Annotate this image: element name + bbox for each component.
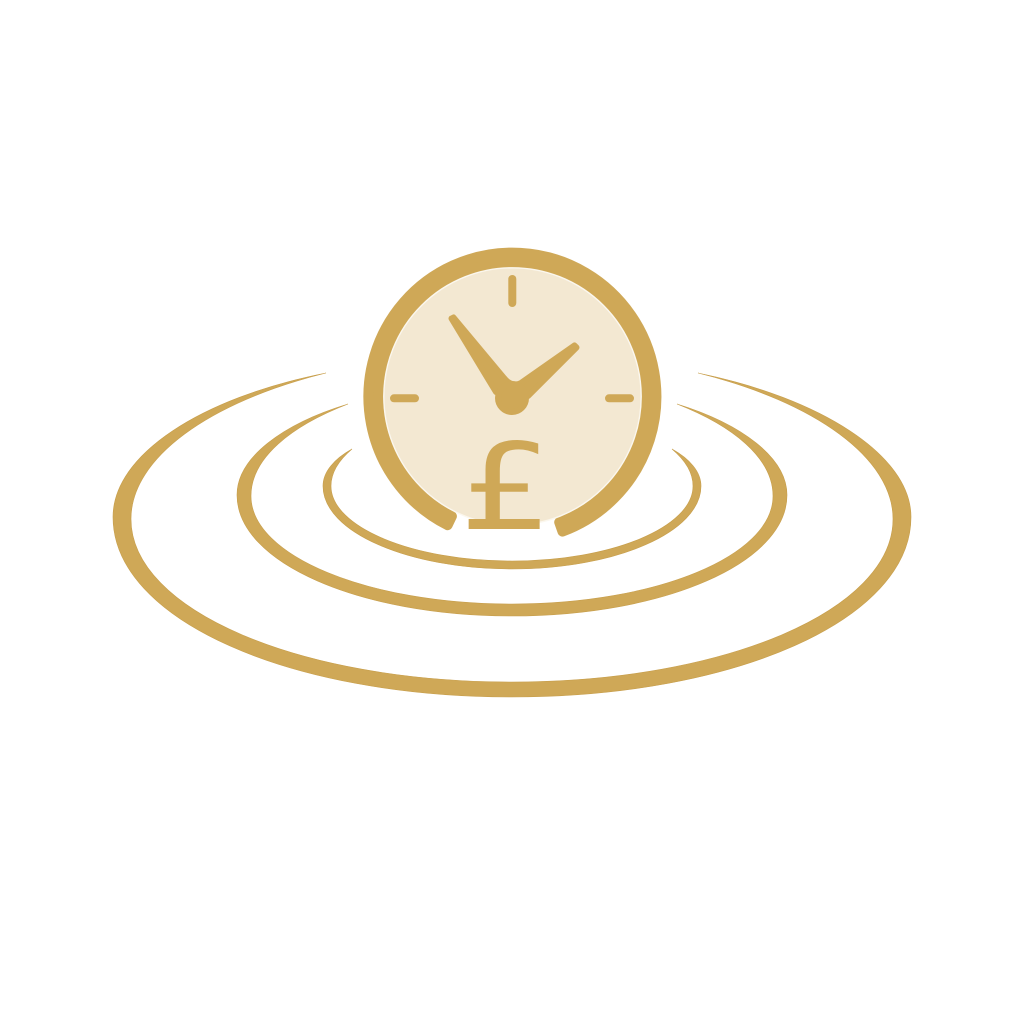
pound sign: £ [459, 418, 553, 558]
tick: nine [390, 394, 419, 402]
tick: twelve [508, 275, 516, 307]
coin rim [368, 253, 656, 532]
outer ripple [113, 373, 911, 697]
middle ripple [237, 404, 787, 616]
clock hands [452, 318, 576, 412]
clock face [384, 268, 641, 525]
tick: three [605, 394, 634, 402]
ripples [113, 373, 911, 697]
icon: clock coin [368, 253, 656, 558]
inner ripple [323, 449, 701, 569]
